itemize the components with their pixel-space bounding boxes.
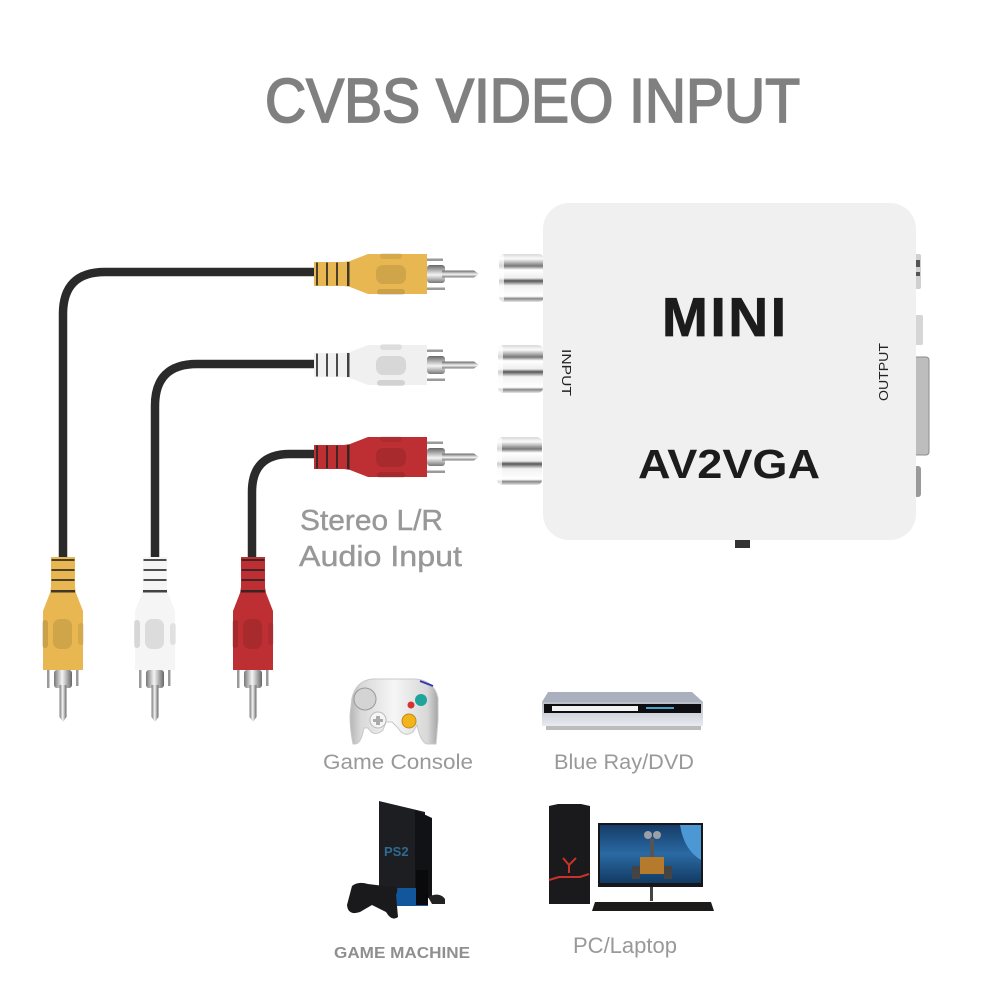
label: game machine: GAME MACHINE bbox=[334, 945, 470, 962]
cable: white bbox=[155, 364, 318, 560]
icon: game machine bbox=[347, 801, 445, 919]
cable: yellow bbox=[63, 272, 318, 560]
keyboard bbox=[592, 902, 714, 911]
label: AV2VGA: AV2VGA bbox=[638, 441, 820, 487]
housing bbox=[543, 203, 916, 540]
cable: red bbox=[252, 454, 318, 560]
icon: PC and monitor bbox=[549, 804, 714, 911]
jack: middle bbox=[498, 345, 543, 393]
label: pc laptop: PC/Laptop bbox=[573, 933, 677, 958]
converter box bbox=[497, 203, 929, 548]
switch bbox=[735, 536, 750, 548]
text: stereo audio input: Audio Input bbox=[299, 541, 462, 573]
title: CVBS VIDEO INPUT bbox=[265, 67, 800, 136]
label: blue ray dvd: Blue Ray/DVD bbox=[554, 751, 694, 774]
icon: game console controller bbox=[350, 679, 438, 744]
icon: game machine: PS2 bbox=[384, 844, 409, 859]
monitor bbox=[598, 823, 703, 887]
label: OUTPUT: OUTPUT bbox=[876, 343, 891, 401]
plug: red vertical bbox=[232, 557, 274, 722]
tower bbox=[549, 804, 590, 904]
plug: yellow horizontal bbox=[314, 253, 479, 295]
label: INPUT: INPUT bbox=[559, 349, 574, 396]
label: MINI: MINI bbox=[662, 286, 786, 348]
connector: right side ports bbox=[914, 254, 929, 497]
icon: DVD player bbox=[542, 692, 703, 730]
label: game console: Game Console bbox=[323, 751, 473, 774]
plug: white horizontal bbox=[314, 344, 479, 386]
text: stereo audio input bbox=[299, 505, 462, 573]
jack: top bbox=[499, 254, 544, 302]
plug: yellow vertical bbox=[42, 557, 84, 722]
text: stereo audio input: Stereo L/R bbox=[300, 505, 443, 537]
jack: bottom bbox=[497, 437, 542, 485]
plug: red horizontal bbox=[314, 436, 479, 478]
plug: white vertical bbox=[134, 557, 176, 722]
